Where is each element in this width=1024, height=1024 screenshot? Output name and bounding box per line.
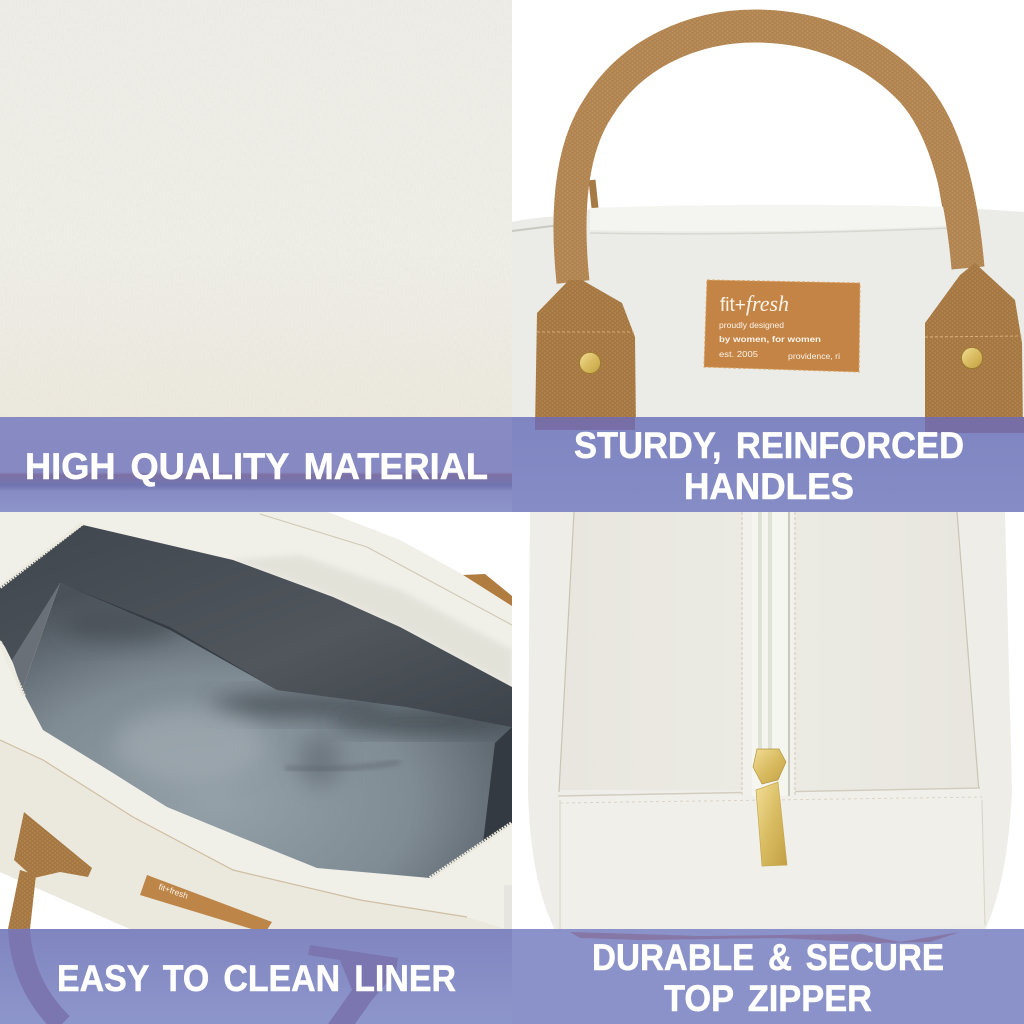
left reinforced tab <box>535 280 636 430</box>
zipper track <box>742 512 795 796</box>
caption band: durable and secure: DURABLE & SECURE <box>592 937 944 978</box>
handle loop <box>8 812 92 929</box>
front pocket <box>558 788 985 930</box>
back handle strands <box>592 180 946 208</box>
caption band: easy to clean liner <box>0 929 512 1024</box>
caption band: easy to clean liner: EASY TO CLEAN LINER <box>57 958 456 999</box>
brand label: est. 2005 <box>719 349 758 359</box>
brand label: providence, ri <box>788 351 840 361</box>
bag body <box>512 205 1024 417</box>
liner back wall <box>0 525 512 727</box>
brand label: proudly designed <box>719 320 784 330</box>
right reinforced tab <box>925 263 1023 433</box>
side label <box>140 875 272 933</box>
liner floor <box>22 583 512 878</box>
caption band: high quality material <box>0 417 512 512</box>
caption band: durable and secure <box>512 929 1024 1024</box>
caption band: durable and secure: TOP ZIPPER <box>664 978 872 1019</box>
liner side fold <box>12 583 60 690</box>
panel: sturdy reinforced handles <box>512 26 1024 512</box>
zipper pull <box>753 749 787 866</box>
fabric texture swatch <box>0 0 512 417</box>
right rivet <box>962 348 982 368</box>
caption band: sturdy reinforced handles <box>512 417 1024 512</box>
left rivet <box>580 352 600 374</box>
caption band: sturdy reinforced handles: HANDLES <box>684 466 854 507</box>
caption band: high quality material: HIGH QUALITY MATERIAL <box>25 446 488 487</box>
brand label <box>704 280 860 372</box>
bag front <box>528 512 1012 930</box>
zipper edges <box>0 523 512 878</box>
brand label: fit+fresh <box>720 291 789 316</box>
panel: easy to clean liner <box>0 512 512 1024</box>
panel: high quality material <box>0 0 512 512</box>
brand label: by women, for women <box>719 334 821 344</box>
liner underlay <box>60 583 512 735</box>
handle arc <box>570 26 968 282</box>
panel: durable and secure top zipper <box>512 512 1024 1024</box>
open bag shell <box>0 512 512 929</box>
handle peek behind shell <box>463 574 512 606</box>
caption band: sturdy reinforced handles: STURDY, REINFORCED <box>574 425 964 466</box>
side label: fit+fresh <box>157 881 190 901</box>
